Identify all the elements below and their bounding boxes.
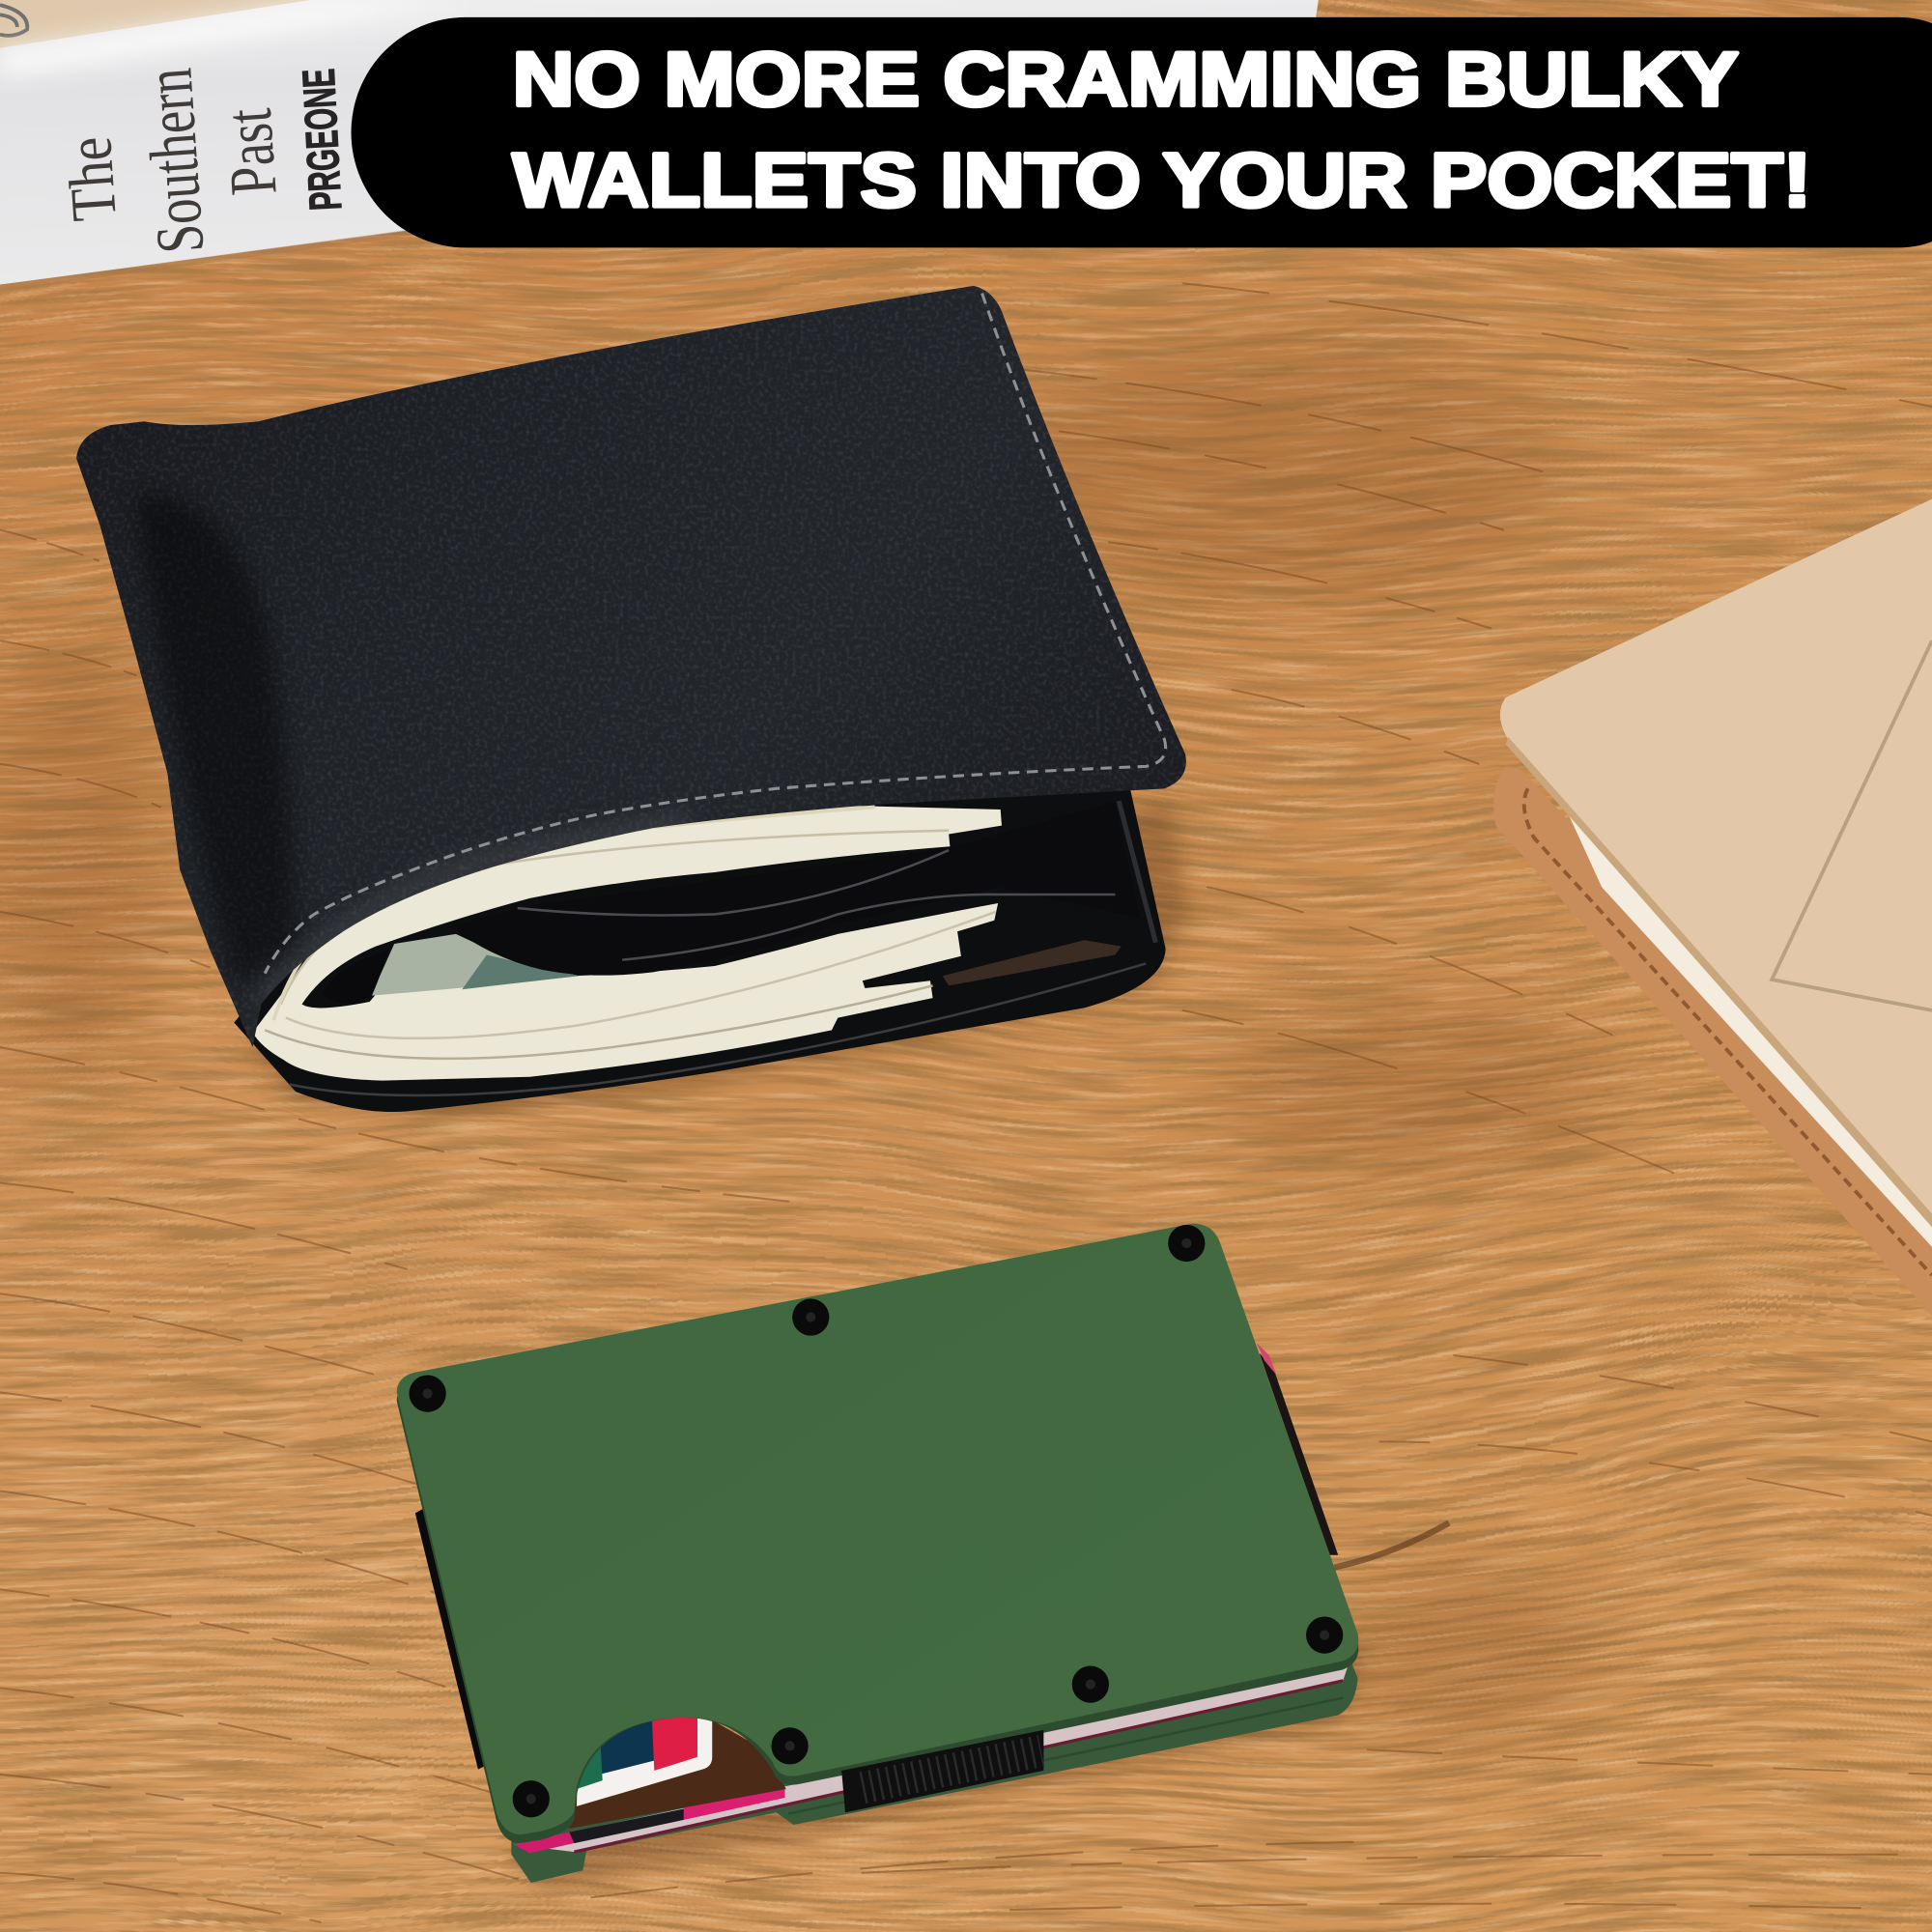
notebook stitching [1524,788,1932,1275]
plate screws [409,1225,1343,1817]
pocket stitching [518,850,1115,960]
spine title text: Southern [130,66,218,256]
notebook [1493,499,1932,1316]
bulky black leather wallet [62,271,1208,1119]
card stack edge [514,1665,1348,1852]
elastic side band right [1260,1353,1338,1555]
banknote portrait [372,934,579,996]
slim green metal wallet [397,1224,1368,1891]
wallet shadow [246,801,1189,1119]
slim wallet shadow [505,1638,1368,1891]
front metal plate [397,1224,1358,1834]
dark gap in bills [323,950,388,1005]
spine title text: Past [212,106,291,198]
headline text [513,36,1811,223]
stack of bills [252,801,1002,1081]
headline text: NO MORE CRAMMING BULKY [513,36,1739,122]
brown inner lining [943,940,1122,985]
spine title text: The [54,134,130,223]
spine title text [54,66,352,256]
wallet back body [234,777,1166,1112]
elastic side band left [415,1506,488,1770]
book with spine text [0,0,1319,291]
notebook leather back cover [1493,766,1932,1316]
flap stitching [265,294,1166,974]
notebook top cover [1500,499,1932,1213]
inner wallet pocket flap [450,801,1140,976]
elastic strap [841,1730,1043,1812]
bottom metal plate [511,1658,1358,1883]
headline banner [352,17,1932,247]
darker wood tone patches [0,332,1614,1737]
headline text: WALLETS INTO YOUR POCKET! [513,137,1811,223]
notebook pages [1562,801,1932,1247]
wallet front flap [76,286,1186,1047]
card in thumb notch [569,1700,786,1829]
knot crack near slim wallet [1334,1523,1449,1567]
plate bevel edge [397,1233,1358,1843]
